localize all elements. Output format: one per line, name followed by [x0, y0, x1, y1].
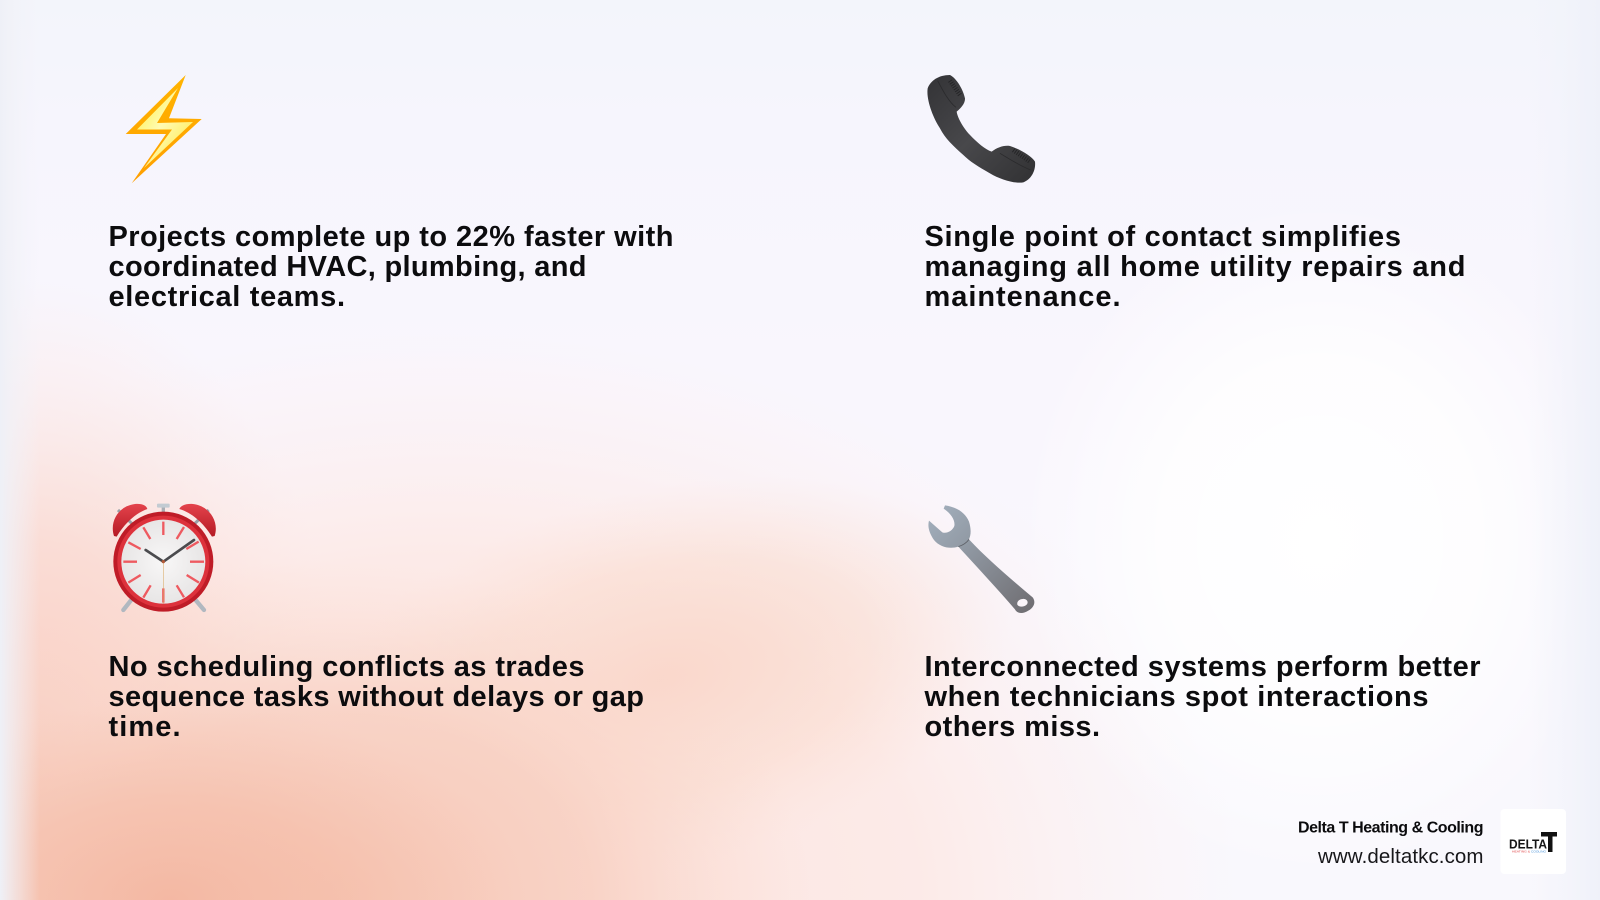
- text: faster projects: electrical teams.: [108, 281, 345, 313]
- company name: Delta T Heating & Cooling: [1298, 820, 1484, 836]
- logo tile: DELTA: [1509, 836, 1548, 852]
- logo tile: COOLING: [1531, 850, 1547, 854]
- text: no scheduling conflicts: No scheduling conflicts as trades: [108, 651, 584, 683]
- panel: no scheduling conflicts: [108, 504, 644, 743]
- text: single point of contact: maintenance.: [924, 281, 1120, 313]
- text: faster projects: Projects complete up to 22% faster with: [108, 221, 674, 253]
- footer: company branding: [1298, 809, 1566, 874]
- icon: alarm clock: [113, 504, 216, 612]
- icon: lightning bolt: [126, 75, 202, 183]
- text: no scheduling conflicts: sequence tasks without delays or gap: [108, 681, 644, 713]
- text: interconnected systems: Interconnected systems perform better: [924, 651, 1480, 683]
- logo tile: [1500, 809, 1566, 874]
- text: interconnected systems: others miss.: [924, 711, 1100, 743]
- icon: telephone receiver: [927, 75, 1035, 183]
- text: interconnected systems: when technicians spot interactions: [924, 681, 1428, 713]
- text: no scheduling conflicts: [108, 651, 644, 743]
- text: single point of contact: managing all home utility repairs and: [924, 251, 1466, 283]
- text: single point of contact: [924, 221, 1466, 313]
- text: faster projects: [108, 221, 674, 313]
- text: interconnected systems: [924, 651, 1480, 743]
- text: no scheduling conflicts: time.: [108, 711, 180, 743]
- logo tile: HEATING &: [1512, 850, 1530, 854]
- text: faster projects: coordinated HVAC, plumbing, and: [108, 251, 586, 283]
- icon: wrench: [928, 505, 1034, 613]
- text: single point of contact: Single point of contact simplifies: [924, 221, 1401, 253]
- panel: faster projects: [108, 75, 674, 313]
- panel: interconnected systems: [924, 505, 1480, 743]
- panel: single point of contact: [924, 75, 1466, 313]
- website url: www.deltatkc.com: [1317, 845, 1484, 868]
